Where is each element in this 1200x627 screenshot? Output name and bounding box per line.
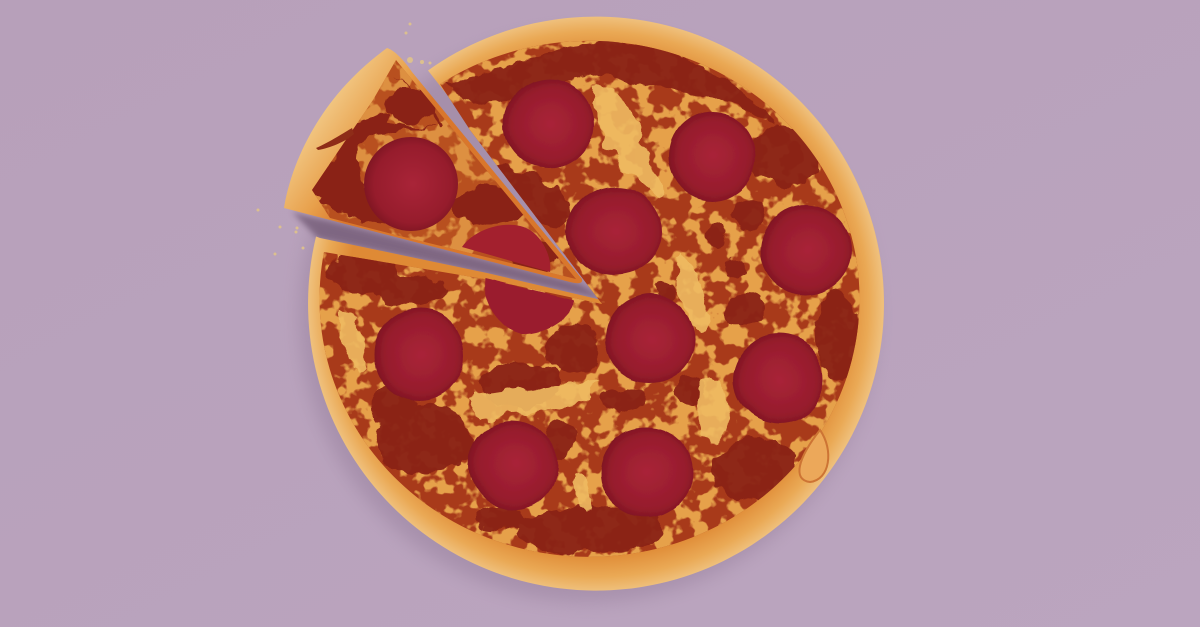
pepperoni slices — [374, 79, 852, 517]
crumbs — [256, 22, 432, 256]
pepperoni — [600, 427, 692, 517]
pizza: main body — [300, 17, 900, 591]
pepperoni — [568, 187, 662, 275]
slice crust — [284, 48, 582, 283]
pepperoni — [484, 278, 575, 334]
shadow under pizza — [300, 30, 876, 602]
pizza: separated slice — [280, 40, 590, 290]
photo: pepperoni pizza on purple background — [256, 16, 884, 602]
crust — [308, 17, 884, 591]
pepperoni — [462, 225, 550, 272]
crust overflow loop — [799, 430, 828, 482]
slice toppings — [312, 60, 576, 279]
pepperoni — [668, 111, 756, 201]
pepperoni — [469, 420, 557, 510]
pepperoni — [734, 334, 824, 424]
pepperoni — [504, 79, 594, 169]
pepperoni — [605, 294, 695, 384]
cheese and sauce — [320, 40, 860, 557]
crust sauce smear — [316, 128, 354, 150]
pepperoni — [760, 205, 852, 295]
shadow in gap between slice and pizza — [292, 212, 606, 300]
pepperoni — [374, 309, 464, 401]
pepperoni — [364, 137, 458, 231]
